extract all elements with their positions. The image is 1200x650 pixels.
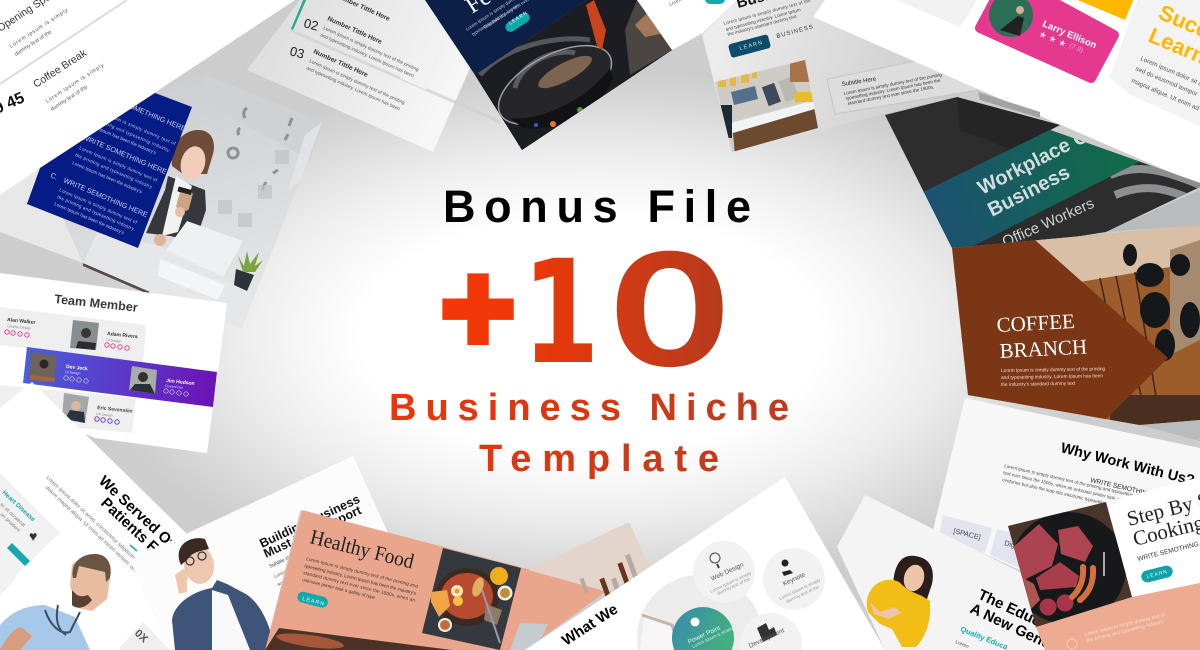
panel: why work with us slide: Why Work With Us? — [1059, 440, 1196, 489]
button: learn teal — [297, 592, 328, 608]
panel: schedule slide, top left: Coffee Break — [31, 47, 89, 91]
panel: business slide with meeting photo — [702, 0, 980, 155]
person: man with glasses — [172, 538, 274, 650]
panel: coffee branch slide: Lorem Ipsum is simply dummy text of the printing — [1001, 366, 1106, 374]
button: learn teal: LEARN — [302, 596, 326, 608]
panel: we served patients slide: Patients For — [97, 494, 172, 566]
button: learn dark — [728, 34, 771, 58]
panel: blue text block: the printing and typesetting industry. — [75, 152, 154, 190]
panel: education slide: The Educa — [975, 586, 1052, 634]
big number: +10: + — [437, 250, 519, 364]
icon: potted plant — [234, 251, 263, 291]
card: highlighted band: UI Design — [65, 370, 81, 376]
illustration: woman with coffee and laptop — [146, 130, 263, 300]
card: subtitle: Lorem Ipsum is simply dummy text of the printing — [843, 72, 943, 96]
panel: numbered list slide: Number Tittle Here — [326, 15, 383, 46]
card: subtitle: Subtitle Here — [841, 77, 877, 88]
card: heart disease: Heart Disease — [1, 489, 37, 524]
panel: cooking slide with navy header: typesetting industry. Lorem — [471, 3, 520, 37]
card: heart disease: ♥ — [29, 528, 37, 544]
panel: building business slide — [130, 456, 388, 650]
card: space: [SPACE] — [953, 526, 982, 542]
panel: healthy food slide: typesetting industry. Lorem Ipsum has been the industry's — [304, 563, 417, 596]
panel: coffee branch slide — [952, 225, 1200, 430]
panel: building business slide: Building Business — [257, 492, 362, 551]
card: digital: Digital — [1004, 538, 1025, 552]
panel: step by step cooking slide: Lorem Ipsum is simple dummy text of — [1084, 612, 1166, 638]
card: top row: Graphic Design — [7, 324, 31, 331]
circle: web design — [693, 541, 755, 595]
panel: we served patients slide: Lorem ipsum dolor sit amet, consectetur adipiscing elit, — [45, 475, 145, 569]
photo: small beige window crop — [510, 623, 548, 650]
photo: breakfast pan — [422, 548, 521, 650]
photo: raw meats on a grill — [1008, 502, 1132, 627]
panel: beige chart slide — [528, 522, 650, 600]
panel: numbered list slide: 02 — [302, 15, 320, 34]
card: digital — [990, 529, 1020, 568]
panel: online learning slide, top right — [813, 0, 1200, 185]
photo: team meeting — [715, 60, 818, 152]
card: subtitle: standard dummy text ever since the 1500s, — [847, 84, 934, 106]
card: top row: Adam Rivera — [107, 331, 138, 340]
panel: blue text block: Lorem ipsum is simply dummy text of — [92, 106, 177, 146]
panel: blue text block: Lorem Ipsum is simply dummy text of — [79, 145, 159, 183]
panel: coffee branch slide: and typesetting industry. Lorem Ipsum has been — [1001, 373, 1103, 381]
big circle image — [637, 575, 763, 650]
panel: why work with us slide: Lorem Ipsum is simply dummy text of the printing and typesetting — [1004, 463, 1134, 498]
card: heart disease — [0, 474, 60, 575]
panel: coffee branch slide: BRANCH — [999, 334, 1088, 363]
panel: workplace office slide: Workplace Of — [974, 121, 1099, 199]
panel: education slide: Lorem — [954, 639, 970, 650]
big number: +10: 0 — [608, 227, 732, 397]
panel: numbered list slide: Lorem ipsum is simply dummy text of the printing — [322, 25, 420, 73]
panel: building business slide: Must Pay Support — [261, 503, 364, 561]
card: Larry Ellison: ★ ★ ★ — [1037, 29, 1068, 49]
title: bonus file: Bonus File — [443, 181, 751, 232]
panel: step by step cooking slide — [1000, 477, 1200, 650]
photo: steaming pan — [470, 0, 680, 155]
card: highlighted band — [23, 347, 217, 407]
panel: we served patients slide — [0, 382, 191, 650]
circle: power point — [672, 607, 735, 650]
card: top row — [0, 307, 146, 362]
panel: services circles slide — [525, 477, 885, 650]
card: bottom row: UX Design — [96, 412, 113, 418]
panel: blue text block: C. — [49, 171, 59, 182]
button: learn: LEARN — [1146, 569, 1169, 580]
panel: blue text block: WRITE SEMOTHING HERE — [62, 176, 149, 219]
card: success learning: magna aliqua. Ut enim ad — [1130, 77, 1200, 112]
big number: +10: 1 — [522, 230, 600, 397]
circle: power point: Lorem Ipsum is simply — [691, 625, 735, 649]
card: highlighted band: Jim Hudson — [166, 378, 195, 387]
panel: coffee branch slide: COFFEE — [996, 309, 1075, 337]
panel: office woman photo slide — [40, 75, 323, 328]
panel: blue text block: Lorem Ipsum has been the industry's — [86, 121, 157, 156]
panel: numbered list slide — [247, 0, 501, 152]
panel: business slide with meeting photo: and typesetting industry. Lorem Ipsum — [725, 7, 801, 32]
accent: grey triangle beside why-work slide — [1140, 420, 1200, 441]
card: Larry Ellison: (7.9) — [1068, 42, 1084, 54]
circle: keynote: Lorem Ipsum is simply — [778, 577, 822, 601]
panel: grey slide behind the photo — [0, 168, 97, 263]
panel: workplace office slide: Office Workers — [1000, 195, 1097, 251]
circle: keynote: dummy text of the — [785, 584, 820, 604]
card: bottom row — [0, 385, 136, 433]
card: success learning: sed do eiusmod tempor — [1134, 65, 1199, 98]
panel: schedule slide, top left: dummy text of the — [14, 29, 53, 58]
panel: why work with us slide: WRITE SEMOTHING HERE — [1090, 477, 1173, 503]
card: highlighted band: Dev Jeck — [66, 364, 88, 372]
circle: development: Development — [748, 627, 786, 650]
button: learn — [504, 10, 532, 34]
circle: keynote — [763, 548, 825, 610]
panel: blue text block: the printing and typesetting industry. — [57, 194, 136, 232]
subtitle: business niche: Business Niche — [389, 387, 789, 429]
panel: services circles slide: What We — [559, 601, 621, 649]
circle: web design: Web Design — [710, 561, 745, 583]
panel: we served patients slide: 0X — [132, 627, 150, 646]
circle: web design: dummy text of the — [716, 576, 751, 596]
panel: building business slide: Subtitle Here — [268, 552, 297, 570]
panel: step by step cooking slide: the printing and typesetting industry — [1086, 619, 1165, 644]
card: space — [938, 515, 992, 553]
panel: building business slide: Lorem ipsum — [273, 563, 299, 579]
accent: grey triangle beside workplace slide — [1106, 190, 1200, 232]
panel: schedule slide, top left: Lorem ipsum is simply — [9, 7, 69, 50]
circle: web design: Lorem Ipsum is simply — [709, 570, 753, 594]
panel: healthy food slide: unknown printer took a galley of type — [302, 577, 376, 600]
panel: blue text block — [27, 90, 192, 248]
panel: we served patients slide: dolore magna aliqua. Ut enim ad minim veniam, quis — [44, 485, 140, 575]
panel: business slide with meeting photo: the industry's standard dummy text — [727, 14, 798, 37]
panel: blue text block: the printing and typesetting industry. — [89, 114, 172, 153]
card: Larry Ellison — [980, 0, 1114, 78]
circle: keynote: Keynote — [782, 571, 807, 588]
panel: building business slide: and typeset — [276, 572, 300, 587]
card: subtitle: typesetting industry. Lorem Ipsum has been the — [845, 78, 941, 101]
panel: blue text block: Lorem Ipsum has been the industry's — [54, 201, 125, 236]
button: learn — [1140, 564, 1174, 584]
panel: workplace office slide — [885, 92, 1200, 251]
panel: blue text block: WRITE SOMETHING HERE — [100, 90, 187, 133]
button: learn: LEARN — [508, 10, 529, 27]
panel: numbered list slide: and typesetting industry. Lorem Ipsum has been — [305, 65, 401, 112]
panel: team member slide: Team Member — [54, 292, 139, 315]
card: success learning — [1113, 0, 1200, 125]
panel: why work with us slide: centuries but also the leap into electronic typesetting — [1002, 477, 1107, 506]
panel: healthy food slide: Healthy Food — [308, 525, 417, 574]
panel: we served patients slide: We Served Over — [95, 472, 191, 563]
panel: numbered list slide: and typesetting industry. Lorem Ipsum has been — [319, 32, 415, 79]
panel: why work with us slide — [933, 398, 1200, 575]
panel: why work with us slide: text ever since the 1500s, when an unknown printer took a galley — [1003, 470, 1133, 505]
panel: healthy food slide: standard dummy text ever since the 1500s, when an — [303, 570, 416, 603]
panel: business slide with meeting photo: BUSINESS — [776, 24, 815, 40]
panel: blue text block: Lorem Ipsum is simply dummy text of — [59, 187, 139, 225]
panel: schedule slide, top left: dummy text of the — [50, 84, 89, 113]
subtitle: template: Template — [479, 438, 719, 480]
panel: white slide fragment with teal button — [637, 0, 737, 50]
big number: +10 — [437, 227, 732, 397]
circle: power point: Power Point — [687, 625, 722, 646]
card: top row: Alan Walker — [7, 317, 36, 326]
panel: education slide — [837, 495, 1053, 650]
panel: cooking slide with navy header — [425, 0, 680, 155]
panel: numbered list slide: 03 — [288, 43, 306, 62]
panel: schedule slide, top left — [0, 0, 295, 195]
panel: healthy food slide: Lorem Ipsum is simply dummy text of the printing and — [306, 556, 419, 589]
panel: numbered list slide: Number Tittle Here — [312, 48, 369, 79]
person: doctor with stethoscope — [0, 554, 111, 650]
card: bottom row: Eric Sevenskin — [97, 405, 133, 415]
person: woman in yellow sweater — [867, 556, 933, 647]
panel: healthy food slide — [265, 510, 608, 650]
panel: team member slide — [0, 273, 227, 453]
card: highlighted band: PowerPoint — [165, 384, 183, 390]
card: Larry Ellison: Larry Ellison — [1041, 19, 1098, 51]
card: top row: UI Design — [106, 338, 122, 344]
panel: blue text block: Lorem Ipsum has been the industry's — [72, 160, 143, 195]
card: subtitle — [827, 50, 978, 114]
panel: blue text block: WRITE SOMETHING HERE — [81, 133, 168, 176]
panel: schedule slide, top left: Lorem ipsum is simply — [45, 62, 105, 105]
panel: numbered list slide: Lorem ipsum is simply dummy text of the printing — [308, 58, 406, 106]
circle: development — [748, 613, 802, 650]
panel: coffee branch slide: the industry's standard dummy text — [1001, 381, 1076, 388]
panel: workplace office slide: Business — [984, 161, 1074, 221]
button: learn dark: LEARN — [739, 40, 764, 52]
card: grey card — [897, 0, 977, 27]
card: yellow card — [1078, 0, 1134, 20]
